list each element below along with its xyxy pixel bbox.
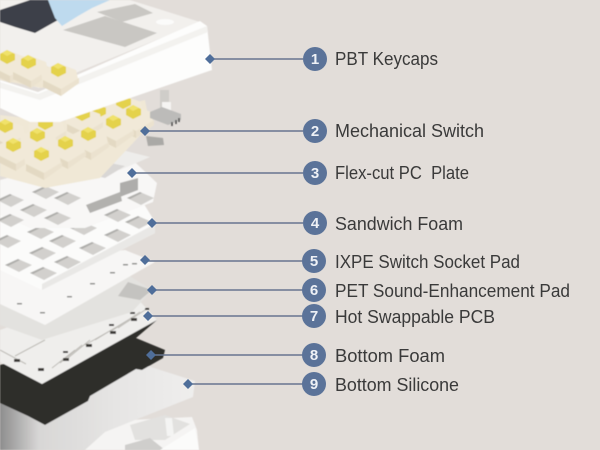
- small connector: [146, 136, 164, 146]
- hot swappable PCB: [0, 285, 157, 384]
- callout 9: Bottom Silicone: [335, 374, 459, 395]
- callout 1: [205, 47, 438, 71]
- callout 2: 2: [311, 123, 319, 140]
- callout 5: 5: [310, 253, 318, 270]
- keycaps dark: [0, 0, 68, 33]
- callout 6: 6: [310, 282, 318, 299]
- callout 8: 8: [310, 347, 318, 364]
- callout 6: [147, 278, 570, 302]
- bottom foam: [0, 320, 165, 425]
- callout 9: [183, 372, 459, 396]
- callout 4: Sandwich Foam: [335, 213, 463, 234]
- callout 7: Hot Swappable PCB: [335, 306, 495, 327]
- callout 4: [147, 211, 463, 235]
- callout 3: Flex-cut PC Plate: [335, 162, 469, 183]
- callout 2: Mechanical Switch: [335, 120, 484, 141]
- callout 9: 9: [310, 376, 318, 393]
- callout 1: 1: [311, 51, 319, 68]
- flex-cut PC plate: [0, 148, 157, 229]
- PET sound-enhancement pad: [0, 270, 152, 340]
- bottom case: [80, 415, 199, 450]
- callout 5: [140, 249, 520, 273]
- callout 3: [127, 161, 469, 185]
- callout 6: PET Sound-Enhancement Pad: [335, 280, 570, 301]
- case knob: [156, 19, 174, 25]
- callout 4: 4: [311, 215, 320, 232]
- callout 3: 3: [311, 165, 319, 182]
- callout 7: [143, 304, 495, 328]
- switches inside case: [0, 50, 79, 96]
- callout 8: [146, 343, 445, 367]
- top case with keycaps: [0, 0, 212, 122]
- grey spacebar keys: [63, 16, 157, 47]
- callout 8: Bottom Foam: [335, 345, 445, 366]
- bottom silicone: [0, 362, 195, 450]
- callout 5: IXPE Switch Socket Pad: [335, 251, 520, 272]
- callout 1: PBT Keycaps: [335, 48, 438, 69]
- mechanical switches: [0, 95, 154, 188]
- keycaps blue: [48, 0, 110, 26]
- callout 2: [140, 119, 484, 143]
- sandwich foam: [0, 165, 155, 290]
- rotary encoder: [150, 90, 181, 126]
- IXPE switch socket pad: [0, 250, 155, 325]
- callout 7: 7: [310, 308, 318, 325]
- exploded keyboard: [0, 0, 212, 450]
